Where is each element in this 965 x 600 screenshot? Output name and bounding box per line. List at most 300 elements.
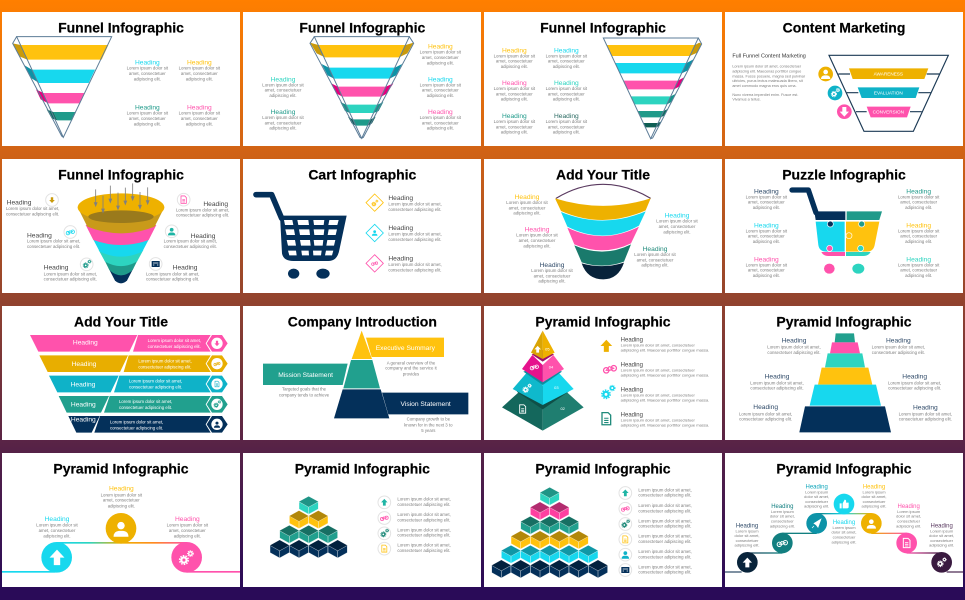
text: heading light teal: adipiscing elit. xyxy=(905,273,932,278)
row: gold xyxy=(39,355,228,372)
text: heading navy: dolor sit amet, xyxy=(734,533,760,538)
text: heading teal: Heading xyxy=(643,246,668,253)
text: item three xyxy=(621,387,709,403)
text: heading yellow: adipiscing elit. xyxy=(186,76,213,81)
text: heading cyan xyxy=(36,516,78,538)
text: heading teal: Heading xyxy=(135,105,160,112)
text: heading pink xyxy=(516,227,558,248)
paragraph text: ultricies, purus lectus malesuada libero, sit xyxy=(732,79,804,83)
text: heading navy: Heading xyxy=(736,523,758,529)
text: line one: Lorem ipsum dolor sit amet, xyxy=(397,497,451,502)
text: heading yellow: Heading xyxy=(515,194,540,201)
text: heading yellow: Lorem ipsum dolor sit xyxy=(179,66,221,71)
text: heading yellow xyxy=(420,44,462,65)
text: line four xyxy=(638,534,692,544)
text: heading pink: adipiscing elit. xyxy=(174,533,201,538)
text: line four: consectetuer adipiscing elit. xyxy=(397,548,451,553)
text: heading teal: dolor sit amet, xyxy=(770,514,795,519)
text: middle right xyxy=(888,373,941,391)
text: heading pink: Lorem ipsum xyxy=(897,509,921,514)
text: heading pink: adipiscing elit. xyxy=(186,121,213,126)
text: heading teal: adipiscing elit. xyxy=(134,121,161,126)
text: heading cyan: adipiscing elit. xyxy=(134,76,161,81)
text: heading yellow: Heading xyxy=(428,44,453,51)
text: heading navy xyxy=(734,523,760,548)
text: heading pink xyxy=(896,504,921,528)
icon: gold arrow xyxy=(600,340,612,352)
text: lower left: Lorem ipsum dolor sit amet, xyxy=(44,271,97,276)
text: heading pink: Lorem ipsum dolor sit xyxy=(516,233,558,238)
text: heading navy: Heading xyxy=(754,188,779,195)
icon: teal document xyxy=(602,413,611,425)
text: item four xyxy=(621,412,709,428)
row: gold: Lorem ipsum dolor sit amet, xyxy=(138,358,192,363)
text: top right: consectetuer adipiscing elit. xyxy=(176,213,229,218)
block: executive summary: Executive Summary xyxy=(376,345,436,352)
bar: evaluation: EVALUATION xyxy=(874,91,903,96)
text: lower left xyxy=(44,265,97,282)
text: heading pink: adipiscing elit. xyxy=(523,243,551,248)
text: heading teal xyxy=(494,113,536,135)
text: heading pink: amet, consectetuer xyxy=(181,116,218,121)
text: heading yellow: amet, consectetuer xyxy=(509,205,546,210)
text: heading pink: Heading xyxy=(502,80,527,87)
text: item three: Heading xyxy=(621,387,643,393)
text: heading yellow xyxy=(101,486,143,508)
puzzle cart xyxy=(792,190,882,274)
cube pyramid xyxy=(270,496,347,558)
text: item three: Heading xyxy=(388,255,413,262)
text: heading pink xyxy=(179,105,221,126)
icon: teal gears xyxy=(619,518,632,530)
text: executive summary description xyxy=(385,360,438,376)
text: heading cyan: Heading xyxy=(45,516,70,523)
text: heading blue: Lorem ipsum xyxy=(805,489,829,494)
subheading: Full Funnel Content Marketing xyxy=(732,53,806,59)
text: heading yellow: Lorem ipsum dolor sit xyxy=(898,228,940,233)
text: heading purple: consectetuer xyxy=(930,538,954,543)
text: heading yellow: Heading xyxy=(187,60,212,67)
text: heading yellow: amet, consectetuer xyxy=(103,498,140,503)
paragraph text: Vivamus a tellus. xyxy=(732,98,761,102)
panel: small cube pyramid xyxy=(243,453,481,587)
icon: pink gears circle xyxy=(171,542,202,573)
text: heading cyan: adipiscing elit. xyxy=(831,539,857,544)
panel: add your title curved funnel xyxy=(484,159,722,293)
text: top right: Heading xyxy=(203,201,228,208)
text: heading cyan xyxy=(831,520,857,544)
title: Cart Infographic xyxy=(308,167,417,183)
text: heading light teal: Lorem ipsum dolor sit xyxy=(262,82,304,87)
text: heading light teal: Lorem ipsum dolor sit xyxy=(898,262,940,267)
icon: yellow diamond xyxy=(366,194,383,211)
icon: middle right xyxy=(165,225,178,238)
text: heading purple: adipiscing elit. xyxy=(929,543,954,548)
text: top left: Heading xyxy=(7,200,32,207)
text: heading cyan: adipiscing elit. xyxy=(753,239,780,244)
title: Funnel Infographic xyxy=(299,20,425,36)
text: heading light teal: adipiscing elit. xyxy=(269,93,297,98)
text: line six: consectetuer adipiscing elit. xyxy=(638,570,692,575)
panel: seven step pyramid xyxy=(725,453,963,587)
connecting line xyxy=(2,542,240,573)
text: heading cyan xyxy=(546,47,588,69)
text: middle right: consectetuer adipiscing elit. xyxy=(164,244,217,249)
icon: pink document circle xyxy=(896,533,917,553)
title: Funnel Infographic xyxy=(58,20,184,36)
text: heading light teal: amet, consectetuer xyxy=(900,268,938,273)
row: teal: Heading xyxy=(71,402,96,409)
text: middle left: consectetuer adipiscing elit. xyxy=(750,386,804,391)
text: mission description: company tends to achieve xyxy=(279,392,330,397)
isometric pyramid: 04 xyxy=(549,365,554,370)
text: heading pink: Lorem ipsum dolor sit xyxy=(167,523,209,528)
icon: lower right xyxy=(149,258,162,270)
text: heading yellow: adipiscing elit. xyxy=(861,504,887,509)
shopping cart xyxy=(256,195,347,279)
title: Pyramid Infographic xyxy=(53,461,189,477)
bar: awareness: AWARENESS xyxy=(874,72,903,77)
text: heading teal: amet, consectetuer xyxy=(129,116,166,121)
text: heading yellow: Heading xyxy=(109,486,134,493)
text: lower right: consectetuer adipiscing elit. xyxy=(146,277,199,282)
text: heading teal: amet, consectetuer xyxy=(496,124,533,129)
icon: cyan arrow circle xyxy=(41,542,72,573)
text: heading blue: dolor sit amet, xyxy=(804,494,829,499)
isometric pyramid: 02 xyxy=(560,406,566,411)
text: heading yellow: Lorem ipsum dolor sit xyxy=(494,53,536,58)
text: heading cyan: adipiscing elit. xyxy=(663,229,691,234)
text: heading yellow: amet, consectetuer xyxy=(181,71,218,76)
text: executive summary description: provides xyxy=(403,371,419,376)
text: upper right xyxy=(872,338,925,355)
icon: cyan thumb circle xyxy=(834,494,854,514)
icon: pink bicycle xyxy=(604,366,616,373)
text: top right xyxy=(176,201,229,218)
paragraph text: massa. Fusce posuere, magna sed pulvinar xyxy=(732,74,806,78)
row: teal: Lorem ipsum dolor sit amet, xyxy=(119,399,172,404)
text: vision description: known for in the next 3 to xyxy=(404,422,453,427)
text: heading teal: Lorem ipsum dolor sit xyxy=(494,119,536,124)
text: heading light teal: Heading xyxy=(906,256,931,263)
text: executive summary description: A general overview of the xyxy=(387,360,436,365)
text: lower left xyxy=(739,404,792,422)
text: heading pink: Heading xyxy=(187,105,212,112)
icon: teal gears xyxy=(378,527,391,540)
row: navy: consectetuer adipiscing elit. xyxy=(110,425,163,430)
title: Company Introduction xyxy=(288,314,437,330)
text: heading yellow: dolor sit amet, xyxy=(861,494,887,499)
paragraph text xyxy=(732,65,806,102)
text: heading cyan: adipiscing elit. xyxy=(553,64,580,69)
text: vision description xyxy=(404,417,453,433)
text: item one: Heading xyxy=(388,195,413,202)
text: heading light teal xyxy=(898,256,940,278)
icon: pink diamond xyxy=(366,255,383,272)
text: item three: consectetuer adipiscing elit. xyxy=(388,267,442,272)
text: heading yellow: Heading xyxy=(906,222,931,229)
icon: teal arrow xyxy=(619,487,632,499)
text: upper left: consectetuer adipiscing elit. xyxy=(767,350,821,355)
text: heading dark teal: Lorem ipsum dolor sit xyxy=(546,119,588,124)
text: executive summary description: company and the service it xyxy=(385,366,438,371)
text: heading navy: consectetuer xyxy=(736,538,759,543)
text: heading cyan: Heading xyxy=(135,60,160,67)
icon: pink bicycle xyxy=(619,502,632,515)
text: heading purple: Heading xyxy=(931,523,953,529)
text: heading teal: adipiscing elit. xyxy=(269,126,297,131)
panel: funnel infographic cone xyxy=(2,159,240,293)
icon: gold person circle xyxy=(106,513,136,544)
text: heading teal: adipiscing elit. xyxy=(905,205,932,210)
text: heading purple: Lorem ipsum xyxy=(930,528,954,533)
icon: pink bicycle xyxy=(378,512,391,524)
text: heading cyan: Heading xyxy=(665,213,690,220)
text: heading blue xyxy=(804,484,829,509)
block: mission statement xyxy=(263,364,348,385)
text: item one: adipiscing elit. Maecenas porttitor congue massa. xyxy=(621,348,709,353)
title: Funnel Infographic xyxy=(540,20,666,36)
row: teal: consectetuer adipiscing elit. xyxy=(119,405,172,410)
text: middle left: Heading xyxy=(765,373,790,380)
title: Pyramid Infographic xyxy=(776,461,912,477)
text: heading teal xyxy=(127,105,169,126)
title: Puzzle Infographic xyxy=(782,167,906,183)
text: line five: consectetuer adipiscing elit. xyxy=(638,554,692,559)
text: lower left: consectetuer adipiscing elit. xyxy=(739,417,792,422)
text: heading light teal xyxy=(262,76,304,98)
text: heading light teal: adipiscing elit. xyxy=(553,97,580,102)
icon: cyan person xyxy=(619,548,632,561)
bar: conversion xyxy=(867,107,911,117)
text: upper left: Lorem ipsum dolor sit amet, xyxy=(767,345,821,350)
text: heading cyan xyxy=(420,76,462,98)
text: middle left: Lorem ipsum dolor sit amet, xyxy=(27,239,80,244)
text: heading pink: adipiscing elit. xyxy=(427,126,454,131)
text: top left xyxy=(6,200,59,216)
text: heading teal: Lorem ipsum xyxy=(771,509,795,514)
text: heading teal: adipiscing elit. xyxy=(501,130,528,135)
text: heading navy: Lorem ipsum dolor sit xyxy=(531,268,573,273)
row: blue teal: Heading xyxy=(71,381,96,388)
text: lower right: Heading xyxy=(913,404,938,411)
text: heading yellow: Lorem ipsum dolor sit xyxy=(420,50,462,55)
text: item two: Heading xyxy=(388,225,413,232)
text: heading yellow: amet, consectetuer xyxy=(422,55,459,60)
bar: conversion: CONVERSION xyxy=(873,110,904,115)
text: heading navy: Heading xyxy=(540,262,565,269)
text: heading cyan: adipiscing elit. xyxy=(43,533,71,538)
text: heading pink: adipiscing elit. xyxy=(501,97,528,102)
icon: top right xyxy=(177,193,190,206)
text: heading yellow xyxy=(179,60,221,81)
text: line four: Lorem ipsum dolor sit amet, xyxy=(397,543,451,548)
text: lower right xyxy=(146,265,199,282)
text: item two xyxy=(621,362,709,378)
icon: down arrow xyxy=(837,104,852,119)
text: lower right: Lorem ipsum dolor sit amet, xyxy=(899,411,952,416)
text: heading light teal: amet, consectetuer xyxy=(265,88,302,93)
text: heading cyan: Heading xyxy=(554,47,579,54)
text: heading pink: adipiscing elit. xyxy=(753,273,780,278)
text: top right: Lorem ipsum dolor sit amet, xyxy=(176,207,229,212)
text: middle right: Lorem ipsum dolor sit amet, xyxy=(164,239,217,244)
text: heading navy xyxy=(746,188,788,210)
text: heading teal xyxy=(262,109,304,131)
block: mission statement: Mission Statement xyxy=(278,372,333,379)
text: item three xyxy=(388,255,442,272)
text: heading teal: amet, consectetuer xyxy=(900,200,938,205)
arrows into funnel xyxy=(94,183,149,212)
text: heading pink: Heading xyxy=(175,516,200,523)
text: heading pink: Lorem ipsum dolor sit xyxy=(179,111,221,116)
text: heading yellow: adipiscing elit. xyxy=(427,60,454,65)
text: heading pink: consectetuer xyxy=(897,519,921,524)
text: heading pink: Lorem ipsum dolor sit xyxy=(746,262,788,267)
text: top left: Lorem ipsum dolor sit amet, xyxy=(6,206,59,211)
text: heading blue: adipiscing elit. xyxy=(804,504,829,509)
icon: purple gears circle xyxy=(931,552,952,573)
text: item one: Heading xyxy=(621,337,643,343)
paragraph text: amet commodo magna eros quis urna. xyxy=(732,84,797,88)
text: heading blue: consectetuer xyxy=(805,499,829,504)
panel: large cube pyramid xyxy=(484,453,722,587)
text: top left: consectetuer adipiscing elit. xyxy=(6,211,59,216)
text: heading navy: Lorem ipsum dolor sit xyxy=(746,194,788,199)
text: line five: Lorem ipsum dolor sit amet, xyxy=(638,549,692,554)
connecting stepped line xyxy=(725,513,963,573)
text: heading teal: adipiscing elit. xyxy=(770,523,795,528)
icon: blue rocket circle xyxy=(806,513,827,534)
text: heading yellow: adipiscing elit. xyxy=(501,64,528,69)
text: lower left: Heading xyxy=(753,404,778,411)
text: heading navy: adipiscing elit. xyxy=(734,543,760,548)
text: heading navy: adipiscing elit. xyxy=(753,205,780,210)
icon: person xyxy=(818,67,833,81)
text: vision description: 5 years xyxy=(421,428,435,433)
text: line six: Lorem ipsum dolor sit amet, xyxy=(638,564,692,569)
text: middle left: consectetuer adipiscing elit. xyxy=(27,244,80,249)
funnel outline xyxy=(829,55,948,131)
text: middle right xyxy=(164,233,217,249)
block: vision statement xyxy=(382,393,468,414)
text: heading cyan xyxy=(656,213,698,234)
text: heading cyan: adipiscing elit. xyxy=(427,93,454,98)
text: heading yellow: Heading xyxy=(863,484,885,490)
text: heading cyan: consectetuer xyxy=(833,535,856,540)
text: heading navy: Lorem ipsum xyxy=(735,528,759,533)
text: heading teal: amet, consectetuer xyxy=(265,120,302,125)
text: heading light teal: Heading xyxy=(271,76,296,83)
text: line three: Lorem ipsum dolor sit amet, xyxy=(638,518,692,523)
text: heading navy: adipiscing elit. xyxy=(538,279,566,284)
text: item four: Lorem ipsum dolor sit amet, consectetuer xyxy=(621,417,696,422)
text: heading pink xyxy=(167,516,209,538)
text: item two: adipiscing elit. Maecenas porttitor congue massa. xyxy=(621,373,709,378)
icon: lower left xyxy=(80,258,93,271)
panel: content marketing xyxy=(725,12,963,146)
text: heading cyan: amet, consectetuer xyxy=(659,224,696,229)
text: mission description: Targeted goals that the xyxy=(282,387,327,392)
icon: gold person circle xyxy=(861,513,882,534)
text: item three: Lorem ipsum dolor sit amet, xyxy=(388,262,442,267)
title: Content Marketing xyxy=(783,20,905,36)
row: pink: Heading xyxy=(73,339,98,346)
text: middle left xyxy=(27,232,80,249)
text: line three: Lorem ipsum dolor sit amet, xyxy=(397,527,451,532)
text: heading cyan: Lorem ipsum dolor sit xyxy=(420,82,462,87)
cube pyramid xyxy=(492,487,608,578)
text: heading teal xyxy=(898,188,940,210)
text: heading cyan: dolor sit amet, xyxy=(831,530,857,535)
text: heading cyan: amet, consectetuer xyxy=(129,71,166,76)
curved funnel xyxy=(555,184,651,279)
title: Funnel Infographic xyxy=(58,167,184,183)
text: middle left xyxy=(750,373,804,391)
text: middle right: Lorem ipsum dolor sit amet, xyxy=(888,380,941,385)
panel: three step pyramid xyxy=(2,453,240,587)
cone funnel xyxy=(78,193,164,283)
text: heading pink: amet, consectetuer xyxy=(748,268,785,273)
text: line one: consectetuer adipiscing elit. xyxy=(397,502,451,507)
paragraph text: Lorem ipsum dolor sit amet, consectetuer xyxy=(732,65,802,69)
text: heading yellow: consectetuer xyxy=(863,499,886,504)
text: item two xyxy=(388,225,442,242)
text: heading cyan: Lorem ipsum dolor sit xyxy=(546,53,588,58)
text: line three: consectetuer adipiscing elit. xyxy=(638,524,692,529)
text: line three xyxy=(638,518,692,529)
text: heading yellow: adipiscing elit. xyxy=(905,239,932,244)
text: heading pink: Lorem ipsum dolor sit xyxy=(494,86,536,91)
text: heading cyan: amet, consectetuer xyxy=(422,88,459,93)
row: teal xyxy=(59,396,228,413)
text: heading pink: adipiscing elit. xyxy=(896,523,921,528)
row: navy xyxy=(68,416,228,433)
text: heading pink: dolor sit amet, xyxy=(896,514,921,519)
text: heading pink: Heading xyxy=(754,256,779,263)
text: heading teal: adipiscing elit. xyxy=(641,263,669,268)
text: item three: Lorem ipsum dolor sit amet, consectetuer xyxy=(621,392,696,397)
panel: stepped pyramid infographic xyxy=(725,306,963,440)
text: line five xyxy=(638,549,692,559)
text: heading teal: Lorem ipsum dolor sit xyxy=(898,194,940,199)
isometric pyramid xyxy=(502,331,584,431)
text: heading cyan: amet, consectetuer xyxy=(548,59,585,64)
block: executive summary xyxy=(366,338,444,357)
text: heading cyan: amet, consectetuer xyxy=(39,528,76,533)
text: heading pink: amet, consectetuer xyxy=(422,120,459,125)
text: heading light teal: Heading xyxy=(554,80,579,87)
text: heading dark teal: amet, consectetuer xyxy=(548,124,585,129)
text: heading yellow: Lorem ipsum xyxy=(862,489,886,494)
text: heading yellow: adipiscing elit. xyxy=(108,503,135,508)
text: lower right: Lorem ipsum dolor sit amet, xyxy=(146,271,199,276)
isometric pyramid: 05 xyxy=(545,346,550,351)
text: heading cyan: Lorem ipsum dolor sit xyxy=(746,228,788,233)
text: line one: consectetuer adipiscing elit. xyxy=(638,493,692,498)
text: heading cyan: Lorem ipsum dolor sit xyxy=(36,523,78,528)
panel: cart infographic xyxy=(243,159,481,293)
text: line one xyxy=(397,497,451,507)
row: navy: Lorem ipsum dolor sit amet, xyxy=(110,419,163,424)
title: Add Your Title xyxy=(74,314,168,330)
text: item one: Lorem ipsum dolor sit amet, consectetuer xyxy=(621,342,696,347)
text: heading cyan: amet, consectetuer xyxy=(748,234,785,239)
text: item three: adipiscing elit. Maecenas porttitor congue massa. xyxy=(621,398,709,403)
text: item four: Heading xyxy=(621,412,643,418)
text: heading yellow: adipiscing elit. xyxy=(513,211,541,216)
text: heading pink: Lorem ipsum dolor sit xyxy=(420,115,462,120)
